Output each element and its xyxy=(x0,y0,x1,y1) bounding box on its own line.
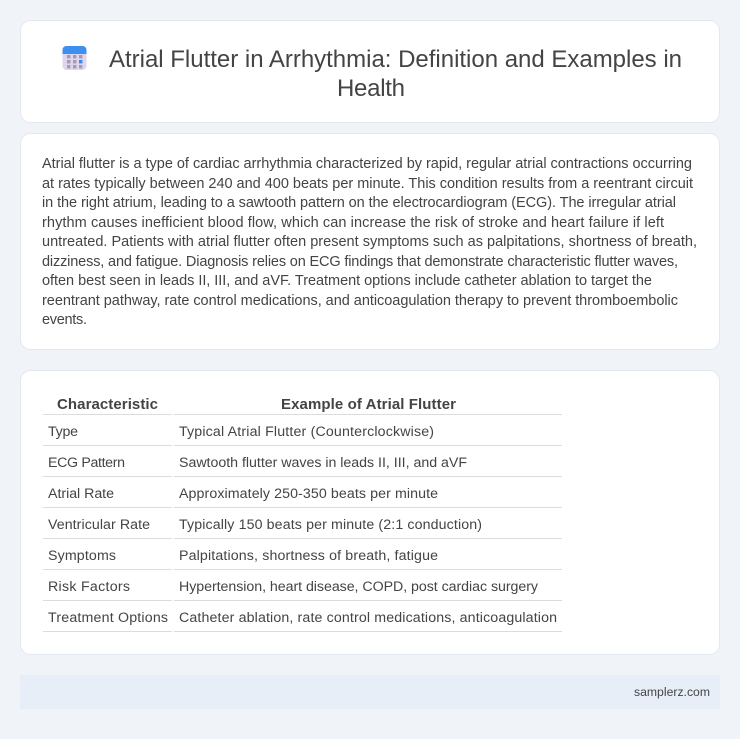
text block: definition paragraph xyxy=(42,156,697,328)
footer xyxy=(20,675,720,709)
table header: Characteristic xyxy=(57,396,158,413)
title xyxy=(109,46,682,102)
icon: calendar xyxy=(62,46,86,70)
panel: description xyxy=(20,134,720,350)
text block: definition paragraph: dizziness, and fatigue. Diagnosis relies on ECG findings that demonstrate characteristic flutter waves, xyxy=(42,254,678,270)
text block: definition paragraph: events. xyxy=(42,312,87,328)
row: atrial rate: Approximately 250-350 beats per minute xyxy=(179,486,438,502)
row: ECG pattern xyxy=(48,455,467,471)
row: ventricular rate xyxy=(48,517,482,533)
row: ventricular rate: Typically 150 beats per minute (2:1 conduction) xyxy=(179,517,482,533)
row: type xyxy=(48,424,434,440)
row: risk factors: Risk Factors xyxy=(48,579,130,595)
panel: title card xyxy=(20,20,720,122)
text block: definition paragraph: reentrant pathway, rate control medications, and anticoagulation therapy to prevent thromboembolic xyxy=(42,293,678,309)
row: treatment options: Catheter ablation, rate control medications, anticoagulation xyxy=(179,610,557,626)
panel: table card xyxy=(20,370,720,654)
text block: definition paragraph: Atrial flutter is a type of cardiac arrhythmia characterized by rapid, regular atrial contractions occurring xyxy=(42,156,692,172)
text block: definition paragraph: at rates typically between 240 and 400 beats per minute. This condition results from a reentrant circuit xyxy=(42,176,693,192)
row: risk factors: Hypertension, heart disease, COPD, post cardiac surgery xyxy=(179,579,539,595)
text block: definition paragraph: often best seen in leads II, III, and aVF. Treatment options include catheter ablation to target the xyxy=(42,273,652,289)
row: treatment options: Treatment Options xyxy=(48,610,168,626)
table header xyxy=(57,396,456,413)
text block: definition paragraph: untreated. Patients with atrial flutter often present symptoms such as palpitations, shortness of breath, xyxy=(42,234,697,250)
row: symptoms: Symptoms xyxy=(48,548,116,564)
row: symptoms: Palpitations, shortness of breath, fatigue xyxy=(179,548,438,564)
footer: samplerz.com xyxy=(634,685,710,699)
title: Atrial Flutter in Arrhythmia: Definition and Examples in xyxy=(109,46,682,73)
row: atrial rate: Atrial Rate xyxy=(48,486,114,502)
row: ventricular rate: Ventricular Rate xyxy=(48,517,150,533)
row: type: Typical Atrial Flutter (Counterclockwise) xyxy=(179,424,434,440)
table header: Example of Atrial Flutter xyxy=(281,396,456,413)
row: type: Type xyxy=(48,424,78,440)
row: symptoms xyxy=(48,548,438,564)
row: atrial rate xyxy=(48,486,438,502)
text block: definition paragraph: rhythm causes inefficient blood flow, which can increase the risk of stroke and heart failure if left xyxy=(42,215,664,231)
table: characteristics of atrial flutter xyxy=(43,396,562,632)
row: ECG pattern: Sawtooth flutter waves in leads II, III, and aVF xyxy=(179,455,467,471)
row: ECG pattern: ECG Pattern xyxy=(48,455,125,471)
title: Health xyxy=(337,75,405,102)
text block: definition paragraph: in the right atrium, leading to a sawtooth pattern on the electrocardiogram (ECG). The irregular atrial xyxy=(42,195,676,211)
